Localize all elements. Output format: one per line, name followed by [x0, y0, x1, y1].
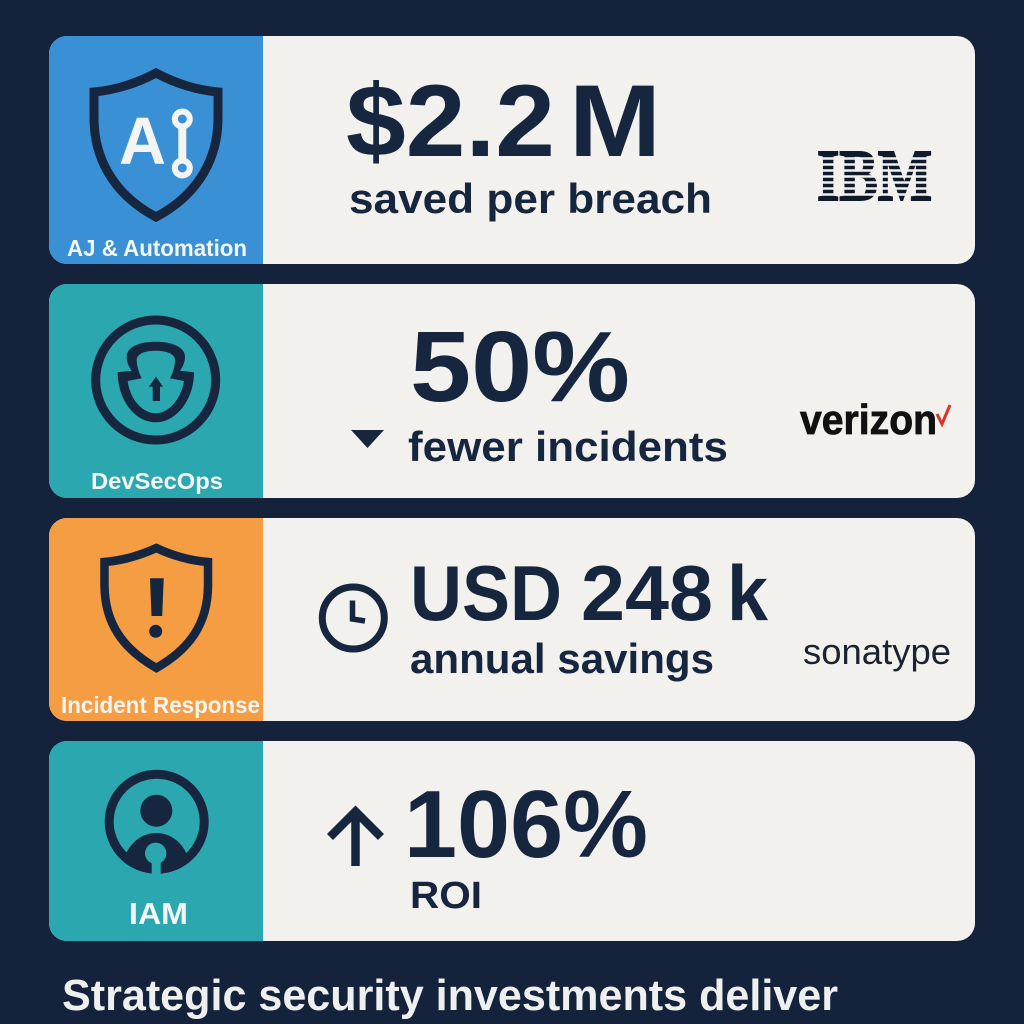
metric: USD 248 k	[410, 549, 769, 637]
category tile: DevSecOps	[49, 284, 263, 498]
metric: USD 248 k: 248	[581, 549, 713, 637]
caption: ROI: ROI	[410, 875, 482, 917]
icon: user in circle	[104, 770, 209, 874]
category tile: IAM	[49, 741, 263, 941]
label: DevSecOps: DevSecOps	[91, 468, 223, 494]
icon: lock in circle	[96, 320, 216, 440]
icon: AI shield: A	[119, 104, 166, 179]
panel: DevSecOps	[49, 284, 975, 498]
icon: alert shield	[104, 548, 208, 668]
category tile: Incident Response	[49, 518, 263, 721]
label: Incident Response: Incident Response	[61, 692, 260, 718]
metric: $2.2 M: M	[569, 64, 661, 178]
metric: 50%: 50%	[410, 311, 630, 423]
category tile: AI & Automation	[49, 36, 263, 264]
panel: AI & Automation	[49, 36, 975, 264]
logo: IBM: IBM	[817, 135, 932, 216]
caption: fewer incidents: fewer incidents	[408, 423, 728, 470]
logo: verizon: verizon	[800, 396, 937, 443]
panel: Incident Response	[49, 518, 975, 721]
icon: clock	[322, 587, 384, 649]
metric: 106%: 106%	[404, 771, 648, 878]
metric: $2.2 M	[346, 64, 661, 178]
panel: IAM	[49, 741, 975, 941]
icon: AI shield	[94, 73, 218, 217]
icon: up arrow	[330, 812, 381, 866]
caption: saved per breach: saved per breach	[349, 175, 712, 222]
logo: sonatype: sonatype	[803, 631, 951, 672]
icon: down triangle	[351, 430, 384, 448]
heading: bottom takeaway: Strategic security investments deliver	[62, 971, 838, 1020]
metric: USD 248 k: USD	[410, 549, 562, 637]
metric: $2.2 M: $2.2	[346, 64, 555, 178]
caption: annual savings: annual savings	[410, 635, 714, 682]
metric: USD 248 k: k	[727, 549, 769, 637]
label: IAM: IAM	[129, 896, 188, 931]
label: AJ & Automation: AJ & Automation	[67, 235, 247, 261]
